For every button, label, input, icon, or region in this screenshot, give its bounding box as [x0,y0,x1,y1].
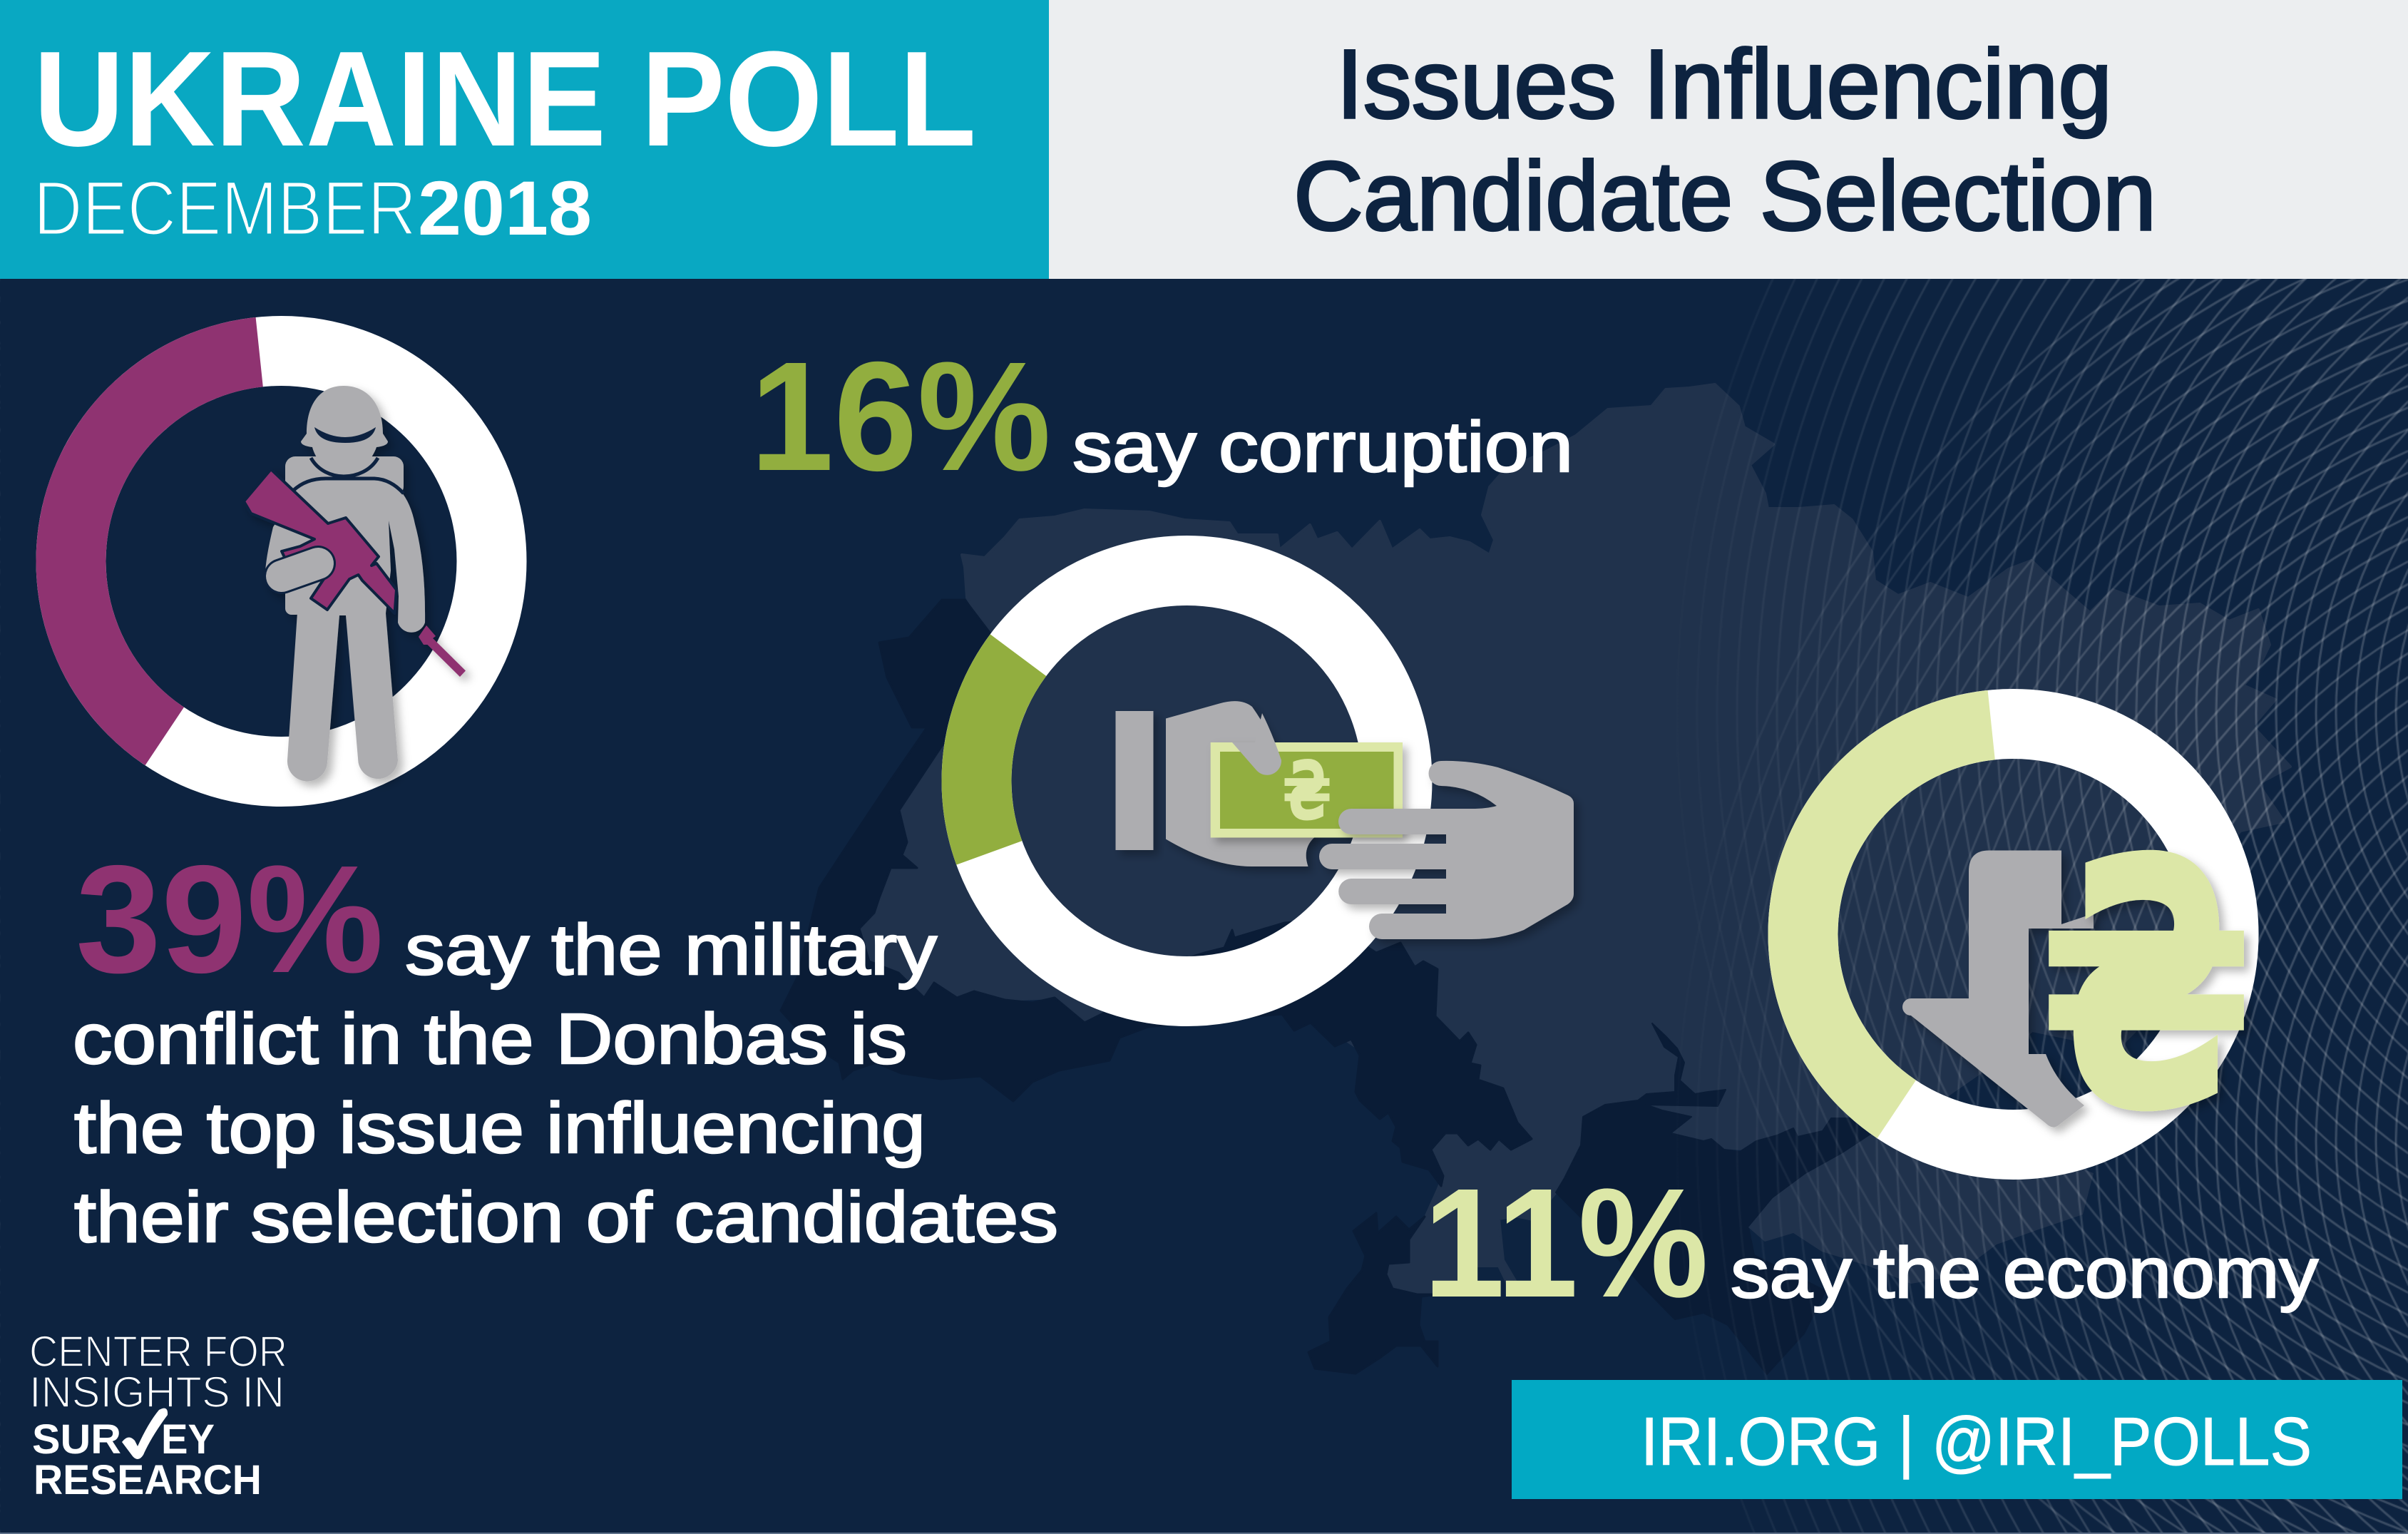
subheading: December 2018: DECEMBER [34,165,416,251]
description text: conflict in the Donbas is [73,999,907,1079]
donut chart: corruption 16% [977,571,1398,991]
subheading: December 2018: 2018 [418,165,592,251]
donut chart: economy 11% [1803,724,2223,1145]
stat: 39 percent military conflict [73,833,1058,1257]
description text [73,910,1058,1257]
icon: check mark [122,1408,168,1459]
shirt cuff [1115,711,1154,850]
down arrow [1902,850,2094,1128]
receiving hand [1319,761,1574,939]
hryvnia sign: ₴ [2039,788,2253,1185]
logo: Center for Insights in Survey Research [29,1327,287,1503]
map: Ukraine silhouette [781,384,2290,1374]
icon: falling hryvnia arrow [1902,788,2253,1185]
description text: the top issue influencing [74,1088,926,1168]
heading: Issues Influencing Candidate Selection: Issues Influencing [1336,30,2112,139]
heading: Issues Influencing Candidate Selection: Candidate Selection [1293,142,2156,251]
logo: Center for Insights in Survey Research: CENTER FOR [29,1327,287,1376]
description text: say the military [405,910,937,990]
banknote: ₴ [1282,744,1332,839]
logo: Center for Insights in Survey Research: SUR [32,1416,121,1463]
header panel: poll title [0,0,1049,279]
big number: 39%: 39% [76,833,384,1005]
heading: Issues Influencing Candidate Selection [1293,30,2156,251]
icon: hands exchanging a bribe banknote [1115,701,1574,939]
big number: 11%: 11% [1423,1157,1708,1330]
description text: their selection of candidates [74,1177,1058,1257]
description text: say the economy [1731,1233,2318,1313]
icon: soldier with rifle [244,386,466,782]
thumb over banknote [1232,713,1281,775]
header panel: topic title [1049,0,2408,279]
logo: Center for Insights in Survey Research: RESEARCH [34,1457,262,1503]
stat: 16 percent corruption [750,330,1573,503]
heading: Ukraine Poll: UKRAINE POLL [34,24,976,175]
stat: 11 percent economy [1423,1157,2318,1330]
banknote [1211,742,1403,839]
footer: website and handle: IRI.ORG | @IRI_POLLS [1641,1403,2312,1480]
logo: Center for Insights in Survey Research: INSIGHTS IN [29,1368,285,1416]
description text: say corruption [1072,407,1573,487]
donut chart: military conflict 39% [71,351,492,772]
logo: Center for Insights in Survey Research: EY [161,1416,215,1463]
footer: website and handle [1512,1380,2402,1499]
giving hand [1166,701,1314,866]
big number: 16%: 16% [750,330,1051,503]
